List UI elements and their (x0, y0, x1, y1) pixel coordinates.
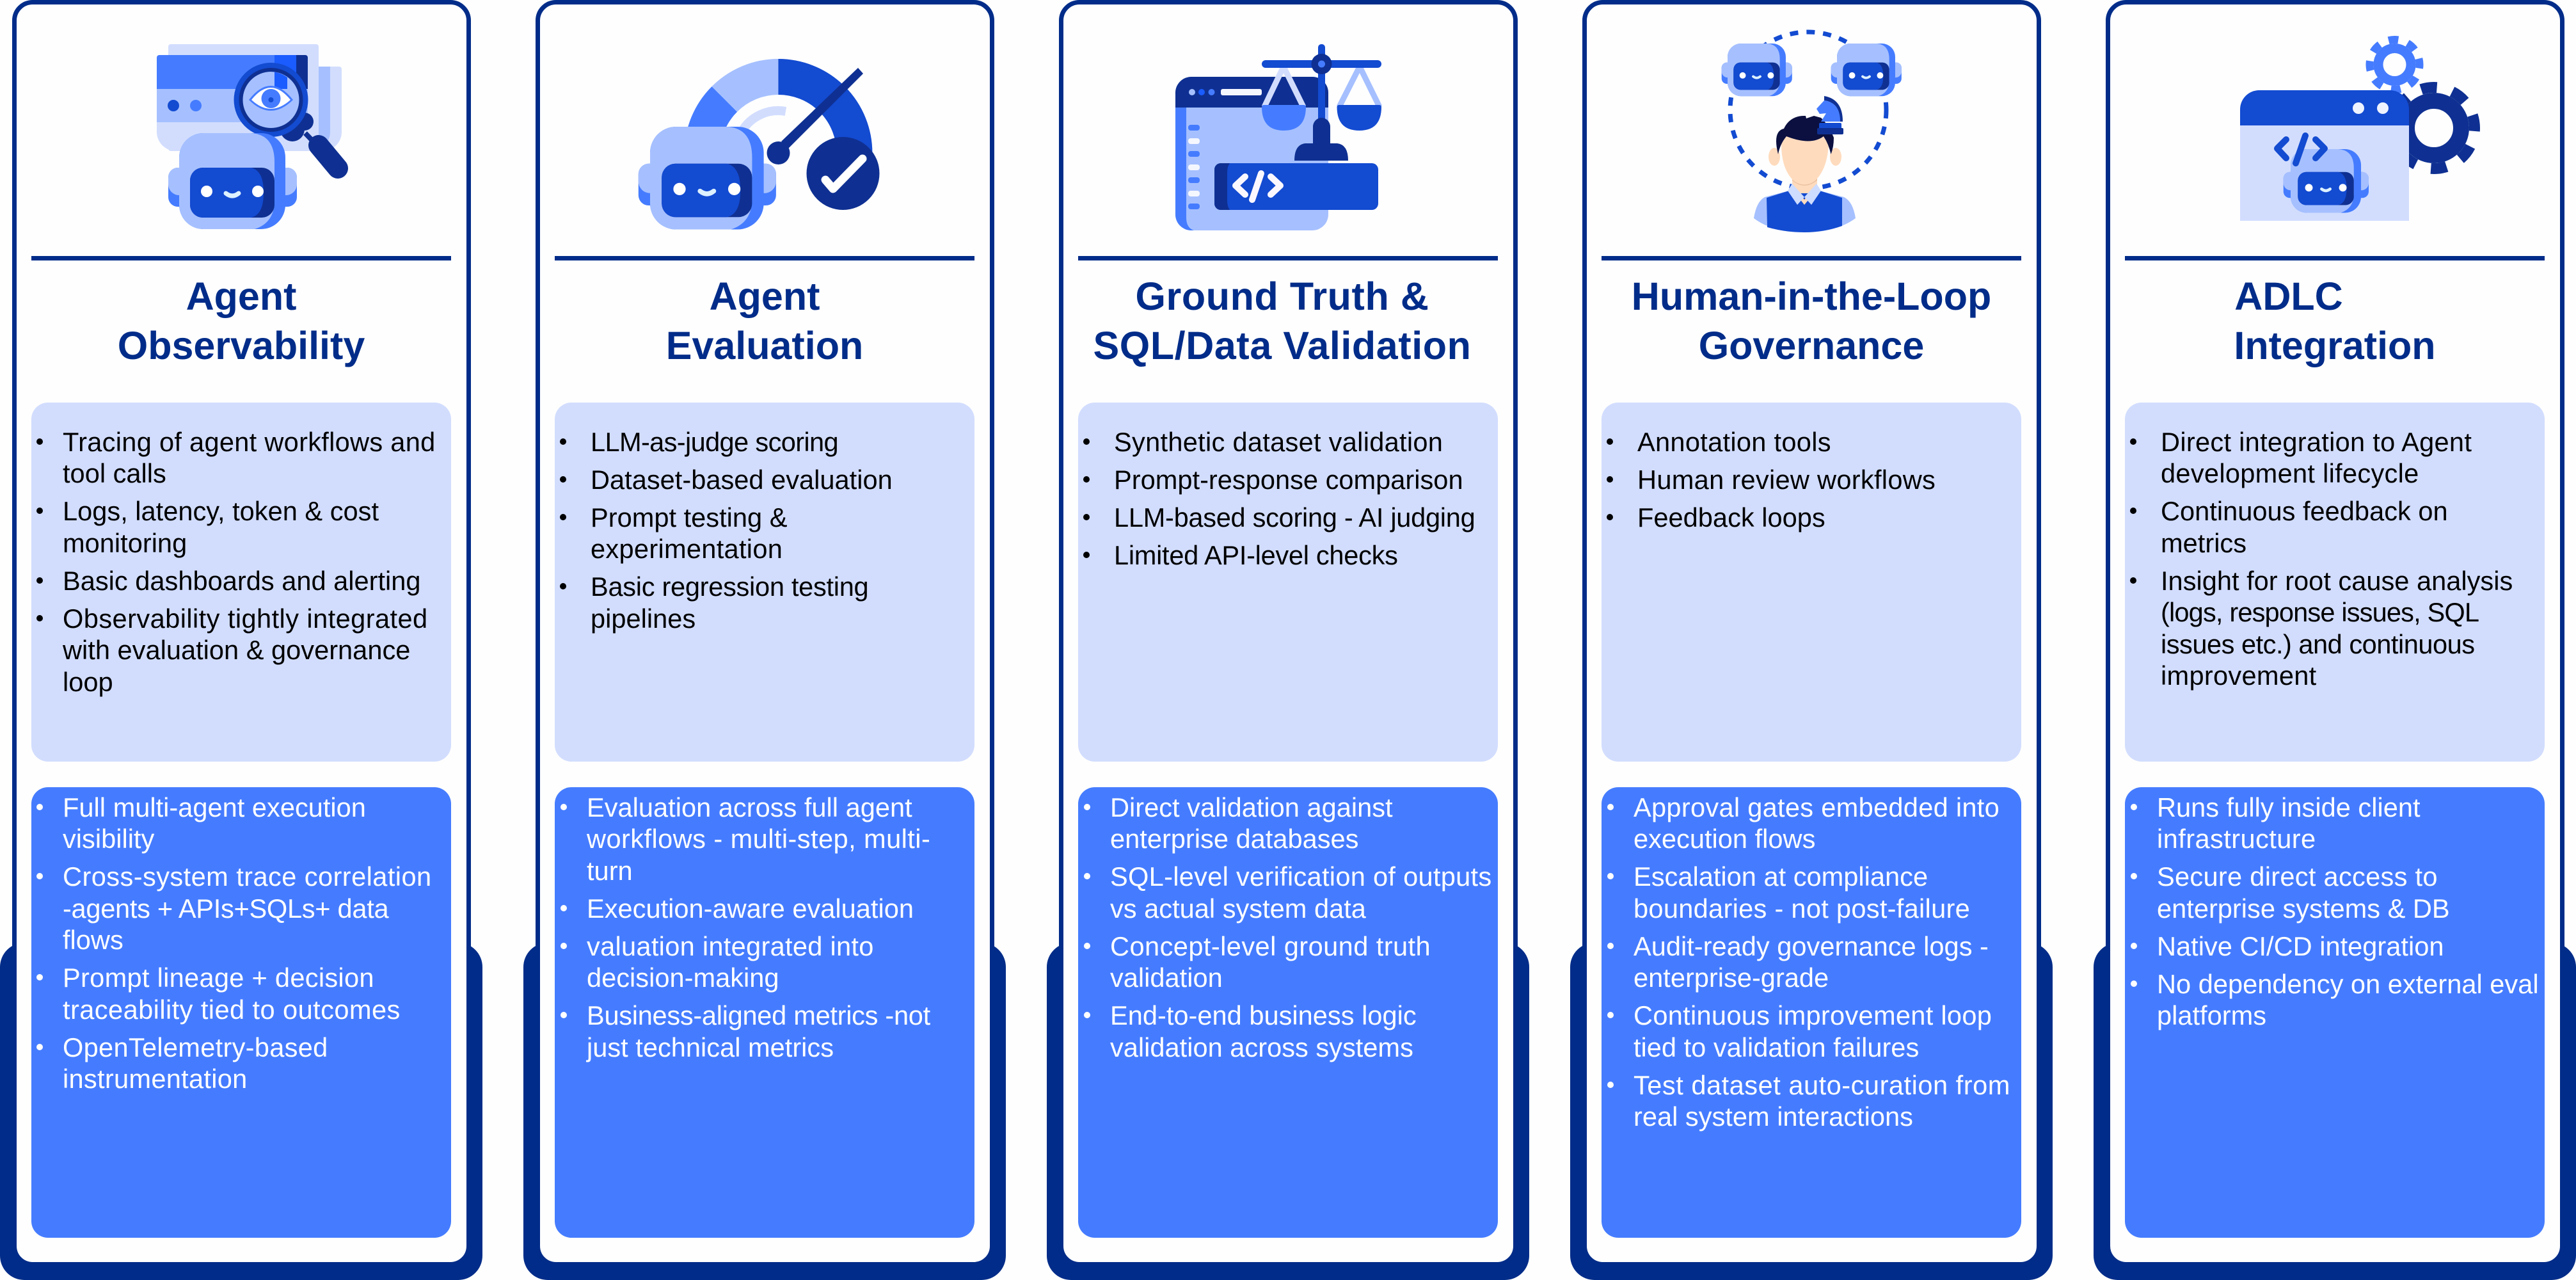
card frame (1059, 0, 1518, 1267)
small gear (2364, 35, 2425, 95)
card frame (2106, 0, 2564, 1267)
heading: ADLC (2234, 274, 2343, 317)
bullet: Prompt lineage + decision (63, 963, 374, 993)
bullet (2157, 792, 2545, 855)
bullet: LLM-as-judge scoring (591, 427, 838, 457)
bullet: decision-making (587, 963, 779, 993)
bullet: Feedback loops (1637, 502, 1825, 532)
bullet: End-to-end business logic (1110, 1000, 1417, 1030)
bullet: Insight for root cause analysis (2161, 566, 2513, 596)
heading: Governance (1699, 324, 1924, 367)
icon: robot in code window with gears (2240, 36, 2480, 221)
bullet: Secure direct access to (2157, 861, 2438, 892)
bullet: Prompt testing & (591, 502, 787, 532)
heading (1093, 274, 1472, 367)
column: Ground Truth & SQL/Data Validation (1047, 0, 1529, 1280)
bullet: just technical metrics (587, 1032, 834, 1062)
heading: Evaluation (666, 324, 863, 367)
heading (1632, 274, 1991, 367)
bullet (1634, 792, 2021, 855)
bullet: boundaries - not post-failure (1634, 893, 1970, 924)
icon: robot with magnifier inspecting a window (157, 44, 348, 229)
bullet (1110, 792, 1498, 855)
bullet: tool calls (63, 458, 166, 488)
divider (31, 256, 451, 260)
bullet (591, 571, 974, 634)
panel: basic capabilities (1078, 403, 1498, 762)
bullet: Direct integration to Agent (2161, 427, 2472, 457)
code brackets (2277, 136, 2325, 163)
bullet: Continuous feedback on (2161, 496, 2448, 526)
person (1754, 116, 1856, 232)
bullet: -agents + APIs+SQLs+ data (63, 893, 388, 924)
bullet: experimentation (591, 534, 783, 564)
bullet: Escalation at compliance (1634, 861, 1928, 892)
bullet (587, 931, 974, 994)
bullet: Basic regression testing (591, 572, 868, 602)
column: Agent Evaluation (523, 0, 1006, 1280)
heading (118, 274, 365, 367)
heading: SQL/Data Validation (1093, 324, 1472, 367)
column: Agent Observability (0, 0, 482, 1280)
bullet: metrics (2161, 528, 2246, 558)
bullet: instrumentation (63, 1064, 248, 1094)
bullet: Logs, latency, token & cost (63, 496, 379, 526)
bullet: Test dataset auto-curation from (1634, 1070, 2010, 1100)
bullet (1110, 1000, 1498, 1063)
bullet: tied to validation failures (1634, 1032, 1919, 1062)
bullet: enterprise-grade (1634, 963, 1829, 993)
bullet (1634, 861, 2021, 924)
bullet: Direct validation against (1110, 792, 1393, 822)
divider (555, 256, 974, 260)
bullet: Evaluation across full agent (587, 792, 912, 822)
bullet: Basic dashboards and alerting (63, 566, 421, 596)
panel: advanced capabilities (2125, 787, 2545, 1238)
panel: basic capabilities (31, 403, 451, 762)
bullet: Execution-aware evaluation (587, 893, 914, 924)
bullet: visibility (63, 824, 154, 854)
robot (2284, 149, 2369, 212)
panel: basic capabilities (2125, 403, 2545, 762)
bullet: enterprise systems & DB (2157, 893, 2450, 924)
card frame (12, 0, 471, 1267)
heading: Agent (710, 274, 820, 317)
bullet: pipelines (591, 604, 696, 634)
card frame (536, 0, 994, 1267)
bullet (63, 861, 451, 956)
bullet: Synthetic dataset validation (1114, 427, 1443, 457)
bullet: Dataset-based evaluation (591, 465, 893, 495)
card base (2094, 943, 2576, 1280)
panel: advanced capabilities (31, 787, 451, 1238)
bullet (587, 792, 974, 886)
heading: Agent (186, 274, 296, 317)
bullet: No dependency on external eval (2157, 969, 2539, 999)
column: Human-in-the-Loop Governance (1570, 0, 2053, 1280)
icon: person with two robots in a dashed loop (1721, 29, 1902, 232)
bullet (63, 603, 451, 698)
divider (1078, 256, 1498, 260)
icon: robot with gauge and check badge (639, 59, 879, 229)
heading (666, 274, 863, 367)
bullet: Cross-system trace correlation (63, 861, 432, 892)
card base (1047, 943, 1529, 1280)
bullet (2161, 565, 2545, 691)
bullet: (logs, response issues, SQL (2161, 597, 2479, 627)
bullet: Native CI/CD integration (2157, 931, 2444, 961)
bullet: Tracing of agent workflows and (63, 427, 436, 457)
bullet (1634, 1069, 2021, 1132)
bullet: platforms (2157, 1000, 2266, 1030)
card base (523, 943, 1006, 1280)
bullet: Prompt-response comparison (1114, 465, 1463, 495)
card base (1570, 943, 2053, 1280)
bullet: Full multi-agent execution (63, 792, 366, 822)
balance scale (1262, 44, 1381, 161)
column: ADLC Integration (2094, 0, 2576, 1280)
bullet (1634, 1000, 2021, 1063)
bullet (2157, 968, 2545, 1032)
bullet: Continuous improvement loop (1634, 1000, 1992, 1030)
bullet: vs actual system data (1110, 893, 1366, 924)
bullet (63, 962, 451, 1025)
bullet: execution flows (1634, 824, 1815, 854)
bullet: Approval gates embedded into (1634, 792, 2000, 822)
bullet (587, 1000, 974, 1063)
divider (2125, 256, 2545, 260)
robot right (1831, 44, 1902, 96)
bullet: monitoring (63, 528, 187, 558)
chess knight (1817, 96, 1843, 134)
bullet: Limited API-level checks (1114, 540, 1398, 570)
heading (2234, 274, 2436, 367)
robot (639, 127, 776, 229)
heading: Observability (118, 324, 365, 367)
bullet (1110, 931, 1498, 994)
bullet (591, 502, 974, 565)
card base (0, 943, 482, 1280)
panel: basic capabilities (1602, 403, 2021, 762)
bullet: turn (587, 856, 633, 886)
bullet: LLM-based scoring - AI judging (1114, 502, 1475, 532)
bullet: real system interactions (1634, 1101, 1913, 1132)
bullet: SQL-level verification of outputs (1110, 861, 1491, 892)
bullet: Business-aligned metrics -not (587, 1000, 930, 1030)
panel: advanced capabilities (555, 787, 974, 1238)
bullet: infrastructure (2157, 824, 2316, 854)
bullet (1634, 931, 2021, 994)
heading: Integration (2234, 324, 2436, 367)
bullet (2157, 861, 2545, 924)
bullet (2161, 426, 2545, 490)
code bar (1214, 163, 1378, 210)
bullet: traceability tied to outcomes (63, 995, 401, 1025)
bullet: enterprise databases (1110, 824, 1358, 854)
bullet (63, 426, 451, 490)
bullet (63, 792, 451, 855)
large gear (2383, 77, 2485, 179)
panel: advanced capabilities (1078, 787, 1498, 1238)
bullet: development lifecycle (2161, 458, 2419, 488)
bullet: OpenTelemetry-based (63, 1032, 328, 1062)
bullet: valuation integrated into (587, 931, 874, 961)
bullet (63, 495, 451, 559)
bullet: with evaluation & governance (63, 635, 410, 665)
robot (168, 133, 297, 229)
card frame (1582, 0, 2041, 1267)
bullet: Concept-level ground truth (1110, 931, 1431, 961)
bullet: Human review workflows (1637, 465, 1936, 495)
robot left (1722, 44, 1792, 96)
bullet: validation (1110, 963, 1223, 993)
bullet: loop (63, 667, 113, 697)
panel: basic capabilities (555, 403, 974, 762)
heading: Ground Truth & (1135, 274, 1429, 317)
bullet: Runs fully inside client (2157, 792, 2421, 822)
bullet (63, 1032, 451, 1094)
window (2240, 90, 2409, 221)
divider (1602, 256, 2021, 260)
icon: code window with balance scale (1175, 44, 1382, 230)
bullet: Annotation tools (1637, 427, 1831, 457)
bullet (1110, 861, 1498, 924)
heading: Human-in-the-Loop (1632, 274, 1991, 317)
bullet (2161, 495, 2545, 559)
bullet: workflows - multi-step, multi- (587, 824, 930, 854)
bullet: improvement (2161, 660, 2316, 691)
panel: advanced capabilities (1602, 787, 2021, 1238)
bullet: Audit-ready governance logs - (1634, 931, 1989, 961)
bullet: validation across systems (1110, 1032, 1413, 1062)
bullet: Observability tightly integrated (63, 604, 428, 634)
bullet: flows (63, 925, 123, 955)
bullet: issues etc.) and continuous (2161, 629, 2475, 659)
